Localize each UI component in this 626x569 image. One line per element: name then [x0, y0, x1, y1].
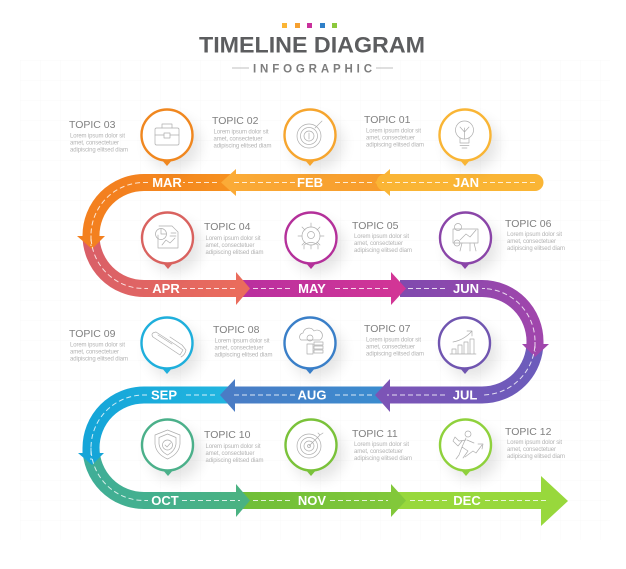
topic 09 text: adipiscing elitsed diam — [70, 356, 128, 362]
topic 05 text: amet, consectetuer — [354, 241, 403, 247]
month: February — [221, 169, 385, 196]
month labels: AUG — [298, 388, 326, 402]
topic 05 text: adipiscing elitsed diam — [354, 248, 412, 254]
topic 04 text: adipiscing elitsed diam — [206, 250, 264, 256]
month labels: SEP — [151, 388, 177, 402]
topic 09 text: Lorem ipsum dolor sit — [70, 342, 125, 348]
topic 08 text: Lorem ipsum dolor sit — [214, 338, 270, 344]
topic 08 text: amet, consectetuer — [214, 346, 264, 352]
topic 07 text — [364, 323, 424, 358]
topic 03 text — [69, 119, 128, 154]
topic 03 text: Lorem ipsum dolor sit — [70, 134, 125, 140]
topic 11 text: adipiscing elitsed diam — [354, 456, 412, 462]
topic 10 text — [204, 429, 264, 464]
topic 07 text: adipiscing elitsed diam — [366, 352, 424, 358]
pin: topic 07 growth chart — [439, 318, 498, 378]
topic 03 text: amet, consectetuer — [70, 140, 119, 146]
topic 10 text: amet, consectetuer — [206, 451, 254, 457]
pin: topic 09 chain link — [142, 318, 200, 378]
topic 10 text: Lorem ipsum dolor sit — [206, 444, 261, 450]
topic 09 text: TOPIC 09 — [69, 328, 116, 340]
pin: topic 06 presentation — [440, 212, 498, 273]
topic 11 text: amet, consectetuer — [354, 449, 403, 455]
topic 06 text — [505, 218, 565, 252]
topic 07 text: TOPIC 07 — [364, 323, 411, 335]
topic 10 text: adipiscing elitsed diam — [206, 458, 264, 464]
timeline road — [77, 169, 568, 526]
pin: topic 02 coin target — [284, 110, 343, 170]
month labels: FEB — [297, 175, 323, 190]
topic 07 text: Lorem ipsum dolor sit — [366, 338, 421, 344]
month: September — [78, 395, 230, 465]
subtitle: INFOGRAPHIC — [253, 64, 372, 76]
topic 01 text: amet, consectetuer — [366, 136, 415, 142]
topic 09 text — [69, 328, 128, 362]
topic 12 text: Lorem ipsum dolor sit — [507, 440, 562, 446]
topic 11 text — [352, 428, 412, 462]
topic 02 text: adipiscing elitsed diam — [214, 144, 272, 150]
month: October — [91, 448, 250, 517]
topic 08 text — [213, 324, 272, 358]
month labels: JAN — [453, 175, 479, 190]
pin: topic 11 target — [286, 420, 344, 480]
topic 12 text: adipiscing elitsed diam — [507, 454, 565, 460]
topic 02 text: amet, consectetuer — [214, 136, 262, 142]
topic 02 text: TOPIC 02 — [212, 115, 259, 127]
topic 03 text: adipiscing elitsed diam — [70, 148, 128, 154]
month: May — [240, 272, 406, 305]
month labels: MAR — [152, 175, 182, 190]
topic 01 text — [364, 114, 424, 148]
topic 05 text: Lorem ipsum dolor sit — [354, 234, 409, 240]
pin: topic 01 lightbulb — [440, 110, 498, 170]
month: August — [220, 379, 385, 412]
header colour squares — [282, 23, 337, 28]
topic 11 text: Lorem ipsum dolor sit — [354, 442, 409, 448]
month: November — [240, 484, 406, 517]
topic 06 text: adipiscing elitsed diam — [507, 246, 565, 252]
topic 12 text: TOPIC 12 — [505, 426, 552, 438]
topic 06 text: Lorem ipsum dolor sit — [507, 232, 562, 238]
month labels: JUN — [453, 281, 479, 296]
topic 09 text: amet, consectetuer — [70, 350, 119, 356]
month labels — [151, 175, 481, 508]
month: June — [400, 288, 549, 357]
topic 04 text: TOPIC 04 — [204, 221, 251, 233]
topic 04 text: amet, consectetuer — [206, 243, 254, 249]
topic 02 text: Lorem ipsum dolor sit — [214, 130, 269, 136]
month: April — [91, 236, 250, 305]
month labels: APR — [152, 281, 180, 296]
topic 08 text: adipiscing elitsed diam — [214, 352, 272, 358]
topic 10 text: TOPIC 10 — [204, 429, 251, 441]
month labels: JUL — [453, 388, 477, 402]
topic 11 text: TOPIC 11 — [352, 428, 398, 440]
pin: topic 05 gear — [286, 212, 344, 273]
topic 12 text — [505, 426, 565, 460]
pin: topic 10 shield — [142, 420, 201, 480]
month: March — [77, 182, 230, 249]
pin: topic 12 running businessman — [440, 420, 499, 480]
month labels: OCT — [151, 493, 179, 508]
topic 06 text: TOPIC 06 — [505, 218, 552, 230]
topic 01 text: adipiscing elitsed diam — [366, 142, 424, 148]
topic 02 text — [212, 115, 272, 150]
road dashes — [91, 182, 548, 500]
pin: topic 03 briefcase — [142, 110, 200, 170]
topic 04 text: Lorem ipsum dolor sit — [206, 236, 261, 242]
topic 03 text: TOPIC 03 — [69, 119, 116, 131]
title: TIMELINE DIAGRAM — [199, 32, 425, 58]
pin: topic 08 cloud database — [284, 318, 343, 378]
topic 05 text: TOPIC 05 — [352, 220, 399, 232]
topic 12 text: amet, consectetuer — [507, 447, 556, 453]
month: December arrow — [395, 476, 568, 526]
topic 07 text: amet, consectetuer — [366, 344, 415, 350]
topic 01 text: TOPIC 01 — [364, 114, 411, 126]
month labels: MAY — [298, 281, 326, 296]
month: January — [375, 169, 535, 196]
topic 05 text — [352, 220, 412, 254]
topic 08 text: TOPIC 08 — [213, 324, 260, 336]
topic 01 text: Lorem ipsum dolor sit — [366, 128, 421, 134]
pin: topic 04 report — [142, 212, 201, 273]
topic 04 text — [204, 221, 264, 256]
month labels: DEC — [453, 493, 481, 508]
topic 06 text: amet, consectetuer — [507, 239, 556, 245]
month labels: NOV — [298, 493, 326, 508]
month: July — [375, 342, 535, 412]
